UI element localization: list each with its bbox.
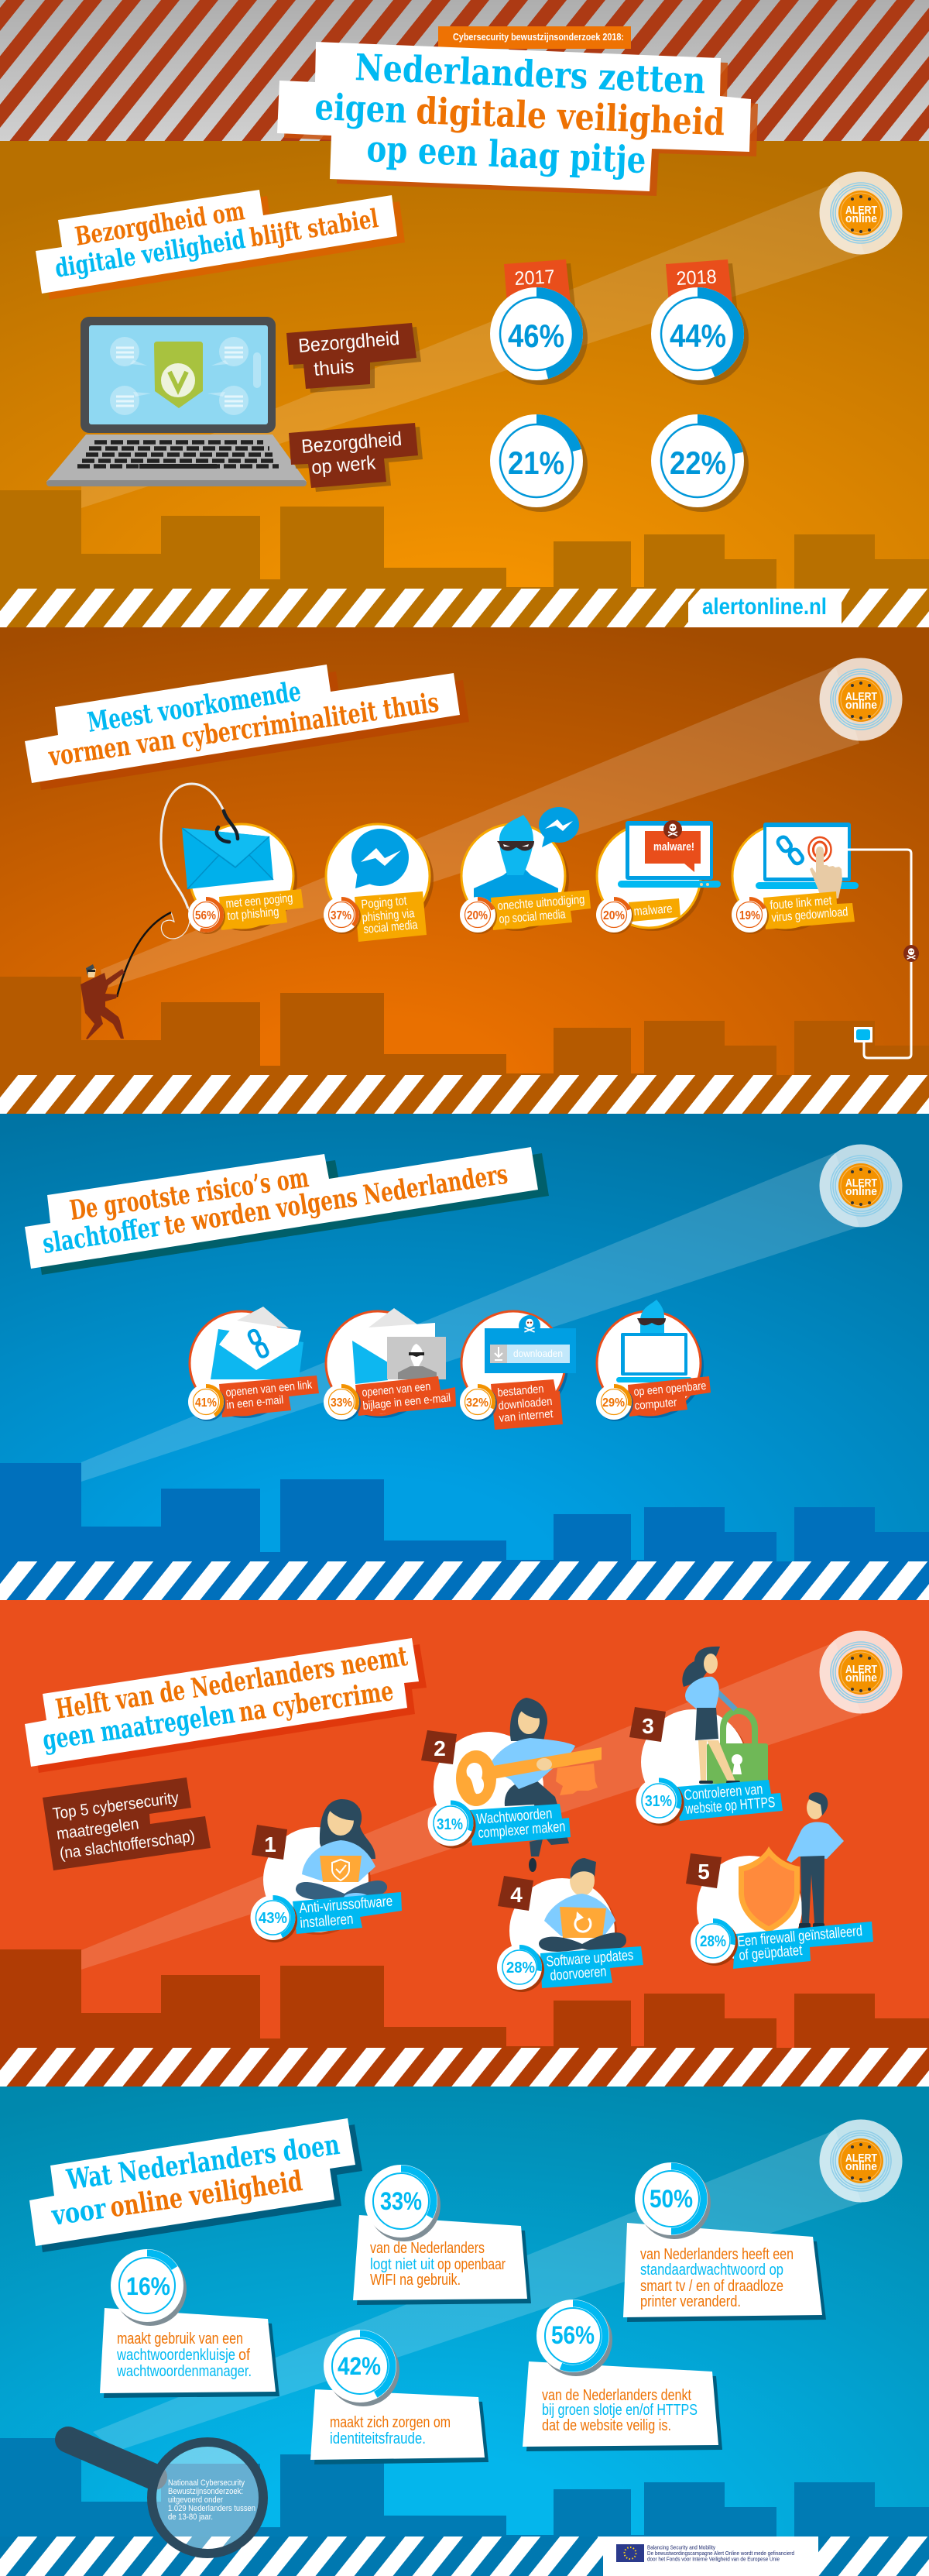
number 3: 3 xyxy=(642,1714,654,1738)
icon: shield xyxy=(739,1846,800,1932)
card 56% xyxy=(523,2300,722,2451)
alert online badge: online xyxy=(845,1671,877,1685)
spotlight beam xyxy=(81,182,865,508)
card 16%: wachtwoordenmanager. xyxy=(116,2363,252,2380)
icon: magnifying glass with methodology: Nationaal Cybersecurity xyxy=(168,2478,245,2488)
stat: 37% social phishing xyxy=(324,891,427,942)
panel: section 3 biggest risks xyxy=(0,1114,929,1600)
card 33%: op openbaar xyxy=(437,2256,506,2273)
label 3 xyxy=(677,1780,783,1821)
section heading: online veiligheid xyxy=(108,2165,304,2224)
label text 1: installeren xyxy=(300,1911,354,1932)
card 50%: van Nederlanders heeft een xyxy=(640,2246,794,2263)
footer: EU funding: De bewustwordingscampagne Alert Online wordt mede gefinancierd xyxy=(647,2550,794,2557)
label 1 xyxy=(293,1892,402,1934)
spotlight beam xyxy=(81,1642,862,1970)
spotlight beam xyxy=(93,2130,862,2451)
footer: EU funding: door het Fonds voor Interne Veiligheid van de Europese Unie xyxy=(647,2556,780,2562)
stat: 29% public computer: 29% xyxy=(602,1396,625,1410)
number 1: 1 xyxy=(264,1832,276,1856)
stripe band xyxy=(0,2048,929,2087)
label: concern at work: Bezorgdheid xyxy=(300,428,403,458)
icon: download window xyxy=(485,1315,576,1373)
section heading: Helft van de Nederlanders neemt xyxy=(53,1640,410,1726)
icon: magnifying glass with methodology: de 13-80 jaar. xyxy=(168,2512,213,2522)
card 56%: 56% xyxy=(551,2321,595,2349)
stat: 56% phishing: 56% xyxy=(195,909,216,922)
stat: 19% bad link xyxy=(732,891,855,934)
card 42%: maakt zich zorgen om xyxy=(330,2414,451,2431)
section heading: te worden volgens Nederlanders xyxy=(162,1159,510,1242)
donut chart 22%: 22% xyxy=(670,445,726,481)
year tag 2017: 2017 xyxy=(514,266,555,290)
sub heading: top 5 measures: Top 5 cybersecurity xyxy=(52,1789,180,1823)
donut chart 21% xyxy=(490,414,588,512)
measure 1: antivirus xyxy=(251,1799,402,1942)
alert online badge: online xyxy=(845,212,877,225)
icon: hacker at public computer xyxy=(616,1300,692,1382)
stat: 20% fake invitation: op social media xyxy=(499,908,566,926)
alert online badge: ALERT xyxy=(845,690,877,703)
figure: woman at padlock xyxy=(682,1647,740,1784)
section heading: voor xyxy=(50,2192,108,2232)
label 5 xyxy=(733,1922,873,1969)
stat: 19% bad link: foute link met xyxy=(770,895,833,912)
number 5: 5 xyxy=(698,1860,710,1884)
icon: envelope on hook xyxy=(182,811,273,889)
stat: 32% downloads: van internet xyxy=(499,1407,554,1425)
skyline xyxy=(0,1949,929,2048)
section heading xyxy=(25,1147,549,1275)
card 16% xyxy=(100,2249,279,2398)
section 5 background xyxy=(0,2087,929,2576)
year tag 2018: 2018 xyxy=(676,266,717,290)
label text 2: complexer maken xyxy=(478,1819,566,1842)
icon: laptop with shield xyxy=(46,317,307,486)
title: eigen xyxy=(314,86,408,132)
card 33%: logt niet uit xyxy=(370,2256,434,2273)
section 1 background xyxy=(0,141,929,627)
donut chart 46%: 46% xyxy=(508,318,564,354)
section heading: slachtoffer xyxy=(40,1211,163,1260)
website tag xyxy=(688,589,850,627)
number 5 xyxy=(686,1853,722,1888)
number 4: 4 xyxy=(510,1883,523,1907)
section 2 background xyxy=(0,627,929,1114)
panel: section 5 what the Dutch do xyxy=(0,2087,929,2576)
percent 31: 31% xyxy=(437,1816,463,1833)
section heading: Wat Nederlanders doen xyxy=(64,2128,341,2196)
icon: envelope with attachment xyxy=(352,1308,446,1384)
card 50%: 50% xyxy=(650,2185,693,2213)
white circle 1 xyxy=(263,1827,371,1935)
label text 3: Controleren van xyxy=(684,1781,763,1804)
section heading xyxy=(25,1638,427,1773)
panel: section 2 cybercrime forms xyxy=(0,627,929,1114)
section 4 background xyxy=(0,1600,929,2087)
stat: 29% public computer: op een openbare xyxy=(633,1379,707,1399)
stat: 33% open attachment: bijlage in een e-mail xyxy=(362,1391,451,1413)
sub heading: top 5 measures: maatregelen xyxy=(56,1815,140,1843)
stat: 56% phishing: met een poging xyxy=(225,891,293,911)
skyline xyxy=(0,490,929,589)
section heading: Bezorgdheid om xyxy=(73,195,247,252)
donut chart 44% xyxy=(651,287,749,385)
section heading xyxy=(29,2118,362,2252)
alert online badge xyxy=(819,1631,903,1713)
stat: 20% malware xyxy=(596,897,680,934)
percent 28: 28% xyxy=(506,1959,535,1977)
number 1 xyxy=(252,1825,287,1860)
stat: 41% open link: 41% xyxy=(195,1396,217,1410)
icon: magnifying glass with methodology: Bewustzijnsonderzoek: xyxy=(168,2487,243,2496)
stat: 19% bad link: virus gedownload xyxy=(771,905,848,925)
footer: EU funding xyxy=(598,2537,818,2576)
label text 2: Wachtwoorden xyxy=(476,1805,553,1828)
white circle 3 xyxy=(641,1709,749,1817)
measure 3: https check xyxy=(629,1647,783,1826)
stat: 32% downloads xyxy=(460,1379,563,1430)
measure 4: software updates xyxy=(497,1858,643,1992)
icon: padlock xyxy=(707,1711,768,1784)
panel: header stripes xyxy=(0,0,929,141)
percent 28 xyxy=(497,1945,544,1992)
percent 43 xyxy=(251,1895,297,1942)
section heading: Meest voorkomende xyxy=(85,675,303,739)
circle backgrounds xyxy=(190,1311,704,1418)
label text 1 xyxy=(299,1894,393,1932)
donut chart 44%: 44% xyxy=(670,318,726,354)
section heading: geen maatregelen xyxy=(40,1698,237,1757)
skyline xyxy=(0,2438,929,2537)
stat: 37% social phishing: 37% xyxy=(331,909,351,922)
icon: laptop with bad link xyxy=(756,823,859,898)
stat: 32% downloads: 32% xyxy=(466,1396,488,1410)
title: op een laag pitje xyxy=(365,128,646,182)
number 2 xyxy=(421,1730,457,1764)
percent 31 xyxy=(636,1778,684,1826)
label text 5: Een firewall geïnstalleerd xyxy=(737,1923,863,1950)
icon: magnifying glass with methodology: 1.029 Nederlanders tussen xyxy=(168,2504,255,2513)
card 16%: wachtwoordenkluisje xyxy=(116,2347,235,2364)
label: concern at work xyxy=(289,423,423,492)
stat: 20% malware: 20% xyxy=(603,909,625,922)
label: concern at home xyxy=(286,323,421,393)
label text 4 xyxy=(546,1947,634,1984)
label text 1: Anti-virussoftware xyxy=(299,1894,393,1917)
title: digitale veiligheid xyxy=(415,90,725,144)
circle backgrounds xyxy=(190,824,840,931)
skyline xyxy=(0,977,929,1075)
stripe band xyxy=(0,1561,929,1600)
stat: 29% public computer: computer xyxy=(634,1396,677,1413)
number 2: 2 xyxy=(434,1736,446,1760)
percent 31: 31% xyxy=(645,1793,672,1810)
percent 31 xyxy=(427,1800,475,1848)
alert online badge: online xyxy=(845,699,877,712)
card 50%: smart tv / en of draadloze xyxy=(640,2278,783,2295)
label: concern at home: Bezorgdheid xyxy=(297,328,400,357)
card 56%: dat de website veilig is. xyxy=(542,2417,671,2434)
section heading: vormen van cybercriminaliteit thuis xyxy=(46,687,441,773)
spotlight beam xyxy=(81,1152,859,1482)
figure: man at shield xyxy=(787,1792,844,1930)
stat: 33% open attachment: openen van een xyxy=(362,1380,431,1400)
section heading xyxy=(36,190,405,300)
white circle 5 xyxy=(697,1856,804,1963)
figure: woman with laptop xyxy=(296,1799,387,1902)
label text 4: doorvoeren xyxy=(550,1963,607,1984)
alert online badge xyxy=(819,658,903,740)
stat: 33% open attachment: 33% xyxy=(331,1396,352,1410)
figure: woman with key xyxy=(456,1698,602,1872)
footer: EU funding: Balancing Security and Mobility xyxy=(647,2544,715,2551)
stat: 20% malware: malware xyxy=(633,902,673,919)
label 4 xyxy=(540,1946,643,1988)
alert online badge: ALERT xyxy=(845,1176,877,1190)
stripe band xyxy=(0,1075,929,1114)
section heading: na cybercrime xyxy=(237,1675,396,1729)
card 33%: WIFI na gebruik. xyxy=(370,2272,461,2289)
title: Nederlanders zetten xyxy=(355,46,706,102)
alert online badge xyxy=(819,1145,903,1227)
white circle 2 xyxy=(434,1732,543,1842)
stat: 20% fake invitation: 20% xyxy=(467,909,488,922)
card 33%: 33% xyxy=(380,2187,422,2215)
stat: 32% downloads: bestanden xyxy=(497,1382,544,1400)
card 16%: maakt gebruik van een xyxy=(117,2330,243,2348)
percent 43: 43% xyxy=(259,1910,287,1927)
donut chart 46% xyxy=(490,287,588,385)
section heading: De grootste risico’s om xyxy=(68,1162,310,1227)
card 50%: standaardwachtwoord op xyxy=(640,2262,783,2279)
card 50% xyxy=(623,2162,826,2322)
label text 3: website op HTTPS xyxy=(684,1795,776,1818)
white circle 4 xyxy=(509,1878,617,1986)
icon: laptop with malware warning xyxy=(618,820,721,888)
label text 5 xyxy=(737,1923,863,1964)
stat: 32% downloads: downloaden xyxy=(498,1395,553,1413)
card 16%: 16% xyxy=(126,2272,170,2300)
icon: download window: downloaden xyxy=(513,1348,563,1359)
label: concern at home: thuis xyxy=(313,355,355,380)
icon: magnifying glass with methodology xyxy=(68,2440,263,2554)
year tag 2017 xyxy=(504,259,576,318)
stripe band xyxy=(0,589,929,627)
stat: 20% fake invitation xyxy=(460,890,591,934)
alert online badge: ALERT xyxy=(845,1663,877,1676)
donut chart 22% xyxy=(651,414,749,512)
stat: 41% open link xyxy=(188,1376,319,1421)
alert online badge: ALERT xyxy=(845,204,877,217)
percent 28 xyxy=(691,1918,738,1966)
figure: phisher xyxy=(81,964,125,1039)
icon: messenger bubble xyxy=(351,829,409,888)
alert online badge xyxy=(819,172,903,254)
label: concern at work: op werk xyxy=(310,452,377,479)
stat: 37% social phishing: social media xyxy=(363,919,418,936)
icon: laptop with malware warning: malware! xyxy=(653,840,694,854)
stripe band xyxy=(0,2537,929,2576)
section heading xyxy=(25,665,469,790)
section heading: blijft stabiel xyxy=(248,203,380,252)
card 56%: van de Nederlanders denkt xyxy=(542,2387,691,2404)
number 3 xyxy=(629,1707,666,1742)
number 4 xyxy=(498,1876,533,1911)
sub heading: top 5 measures xyxy=(43,1777,211,1870)
stat: 19% bad link: 19% xyxy=(739,909,760,922)
card 56%: bij groen slotje en/of HTTPS xyxy=(542,2402,698,2419)
icon: fishing line and rod xyxy=(117,784,224,997)
alert online badge: online xyxy=(845,1185,877,1198)
card 42% xyxy=(310,2330,488,2464)
donut chart 21%: 21% xyxy=(508,445,564,481)
stat: 41% open link: openen van een link xyxy=(225,1378,313,1400)
icon: magnifying glass with methodology: uitgevoerd onder xyxy=(168,2495,223,2505)
figure: man with laptop xyxy=(539,1858,626,1952)
icon: hacker silhouette xyxy=(474,807,579,902)
title xyxy=(277,42,758,196)
percent 28: 28% xyxy=(700,1933,726,1950)
icon: envelope with link xyxy=(211,1307,303,1379)
label text 5: of geüpdatet xyxy=(739,1942,804,1964)
skyline xyxy=(0,1463,929,1561)
card 42%: identiteitsfraude. xyxy=(330,2430,426,2447)
stat: 56% phishing: tot phishing xyxy=(227,905,279,923)
measure 2: passwords xyxy=(421,1698,602,1872)
section heading: digitale veiligheid xyxy=(53,224,247,283)
survey tag: Cybersecurity bewustzijnsonderzoek 2018: xyxy=(453,31,624,43)
panel: section 4 measures xyxy=(0,1600,929,2087)
label 2 xyxy=(470,1804,571,1846)
section 3 background xyxy=(0,1114,929,1600)
card 33%: van de Nederlanders xyxy=(370,2240,485,2257)
stat: 56% phishing xyxy=(188,889,303,934)
label text 2 xyxy=(476,1805,566,1842)
stat: 37% social phishing: phishing via xyxy=(362,907,415,925)
label text 3 xyxy=(684,1781,776,1818)
spotlight beam xyxy=(101,666,859,989)
year tag 2018 xyxy=(666,259,738,318)
sub heading: top 5 measures: (na slachtofferschap) xyxy=(59,1827,196,1863)
stat: 20% fake invitation: onechte uitnodiging xyxy=(497,893,585,913)
alert online badge xyxy=(819,2119,903,2203)
card 16%: of xyxy=(238,2347,250,2364)
stat: 33% open attachment xyxy=(324,1376,456,1421)
alert online badge: ALERT xyxy=(845,2152,877,2165)
cable with skull xyxy=(848,850,919,1058)
card 50%: printer veranderd. xyxy=(640,2293,741,2310)
alert online badge: online xyxy=(845,2160,877,2173)
label text 4: Software updates xyxy=(546,1947,634,1970)
stat: 37% social phishing: Poging tot xyxy=(361,895,408,912)
panel: section 1 concern xyxy=(0,26,929,627)
card 33% xyxy=(353,2165,531,2305)
measure 5: firewall xyxy=(686,1792,873,1969)
stat: 29% public computer xyxy=(596,1376,711,1421)
card 42%: 42% xyxy=(338,2352,381,2380)
stat: 41% open link: in een e-mail xyxy=(226,1393,284,1412)
survey tag xyxy=(438,26,631,49)
website tag: alertonline.nl xyxy=(702,594,827,620)
